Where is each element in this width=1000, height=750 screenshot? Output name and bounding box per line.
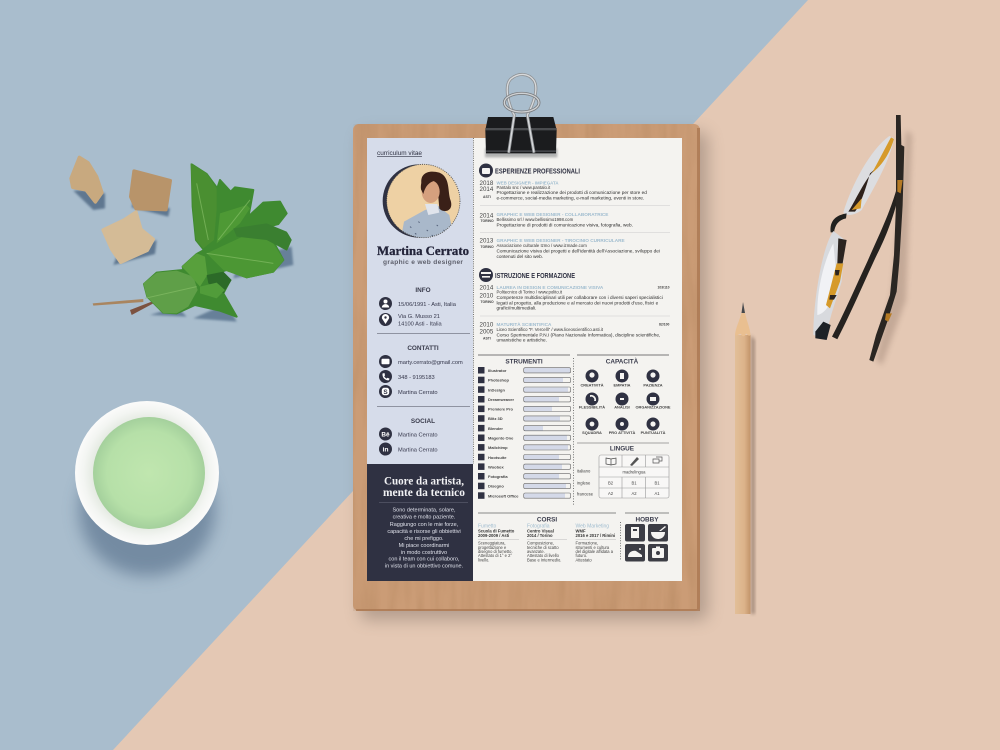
experience heading: ESPERIENZE PROFESSIONALI bbox=[495, 166, 580, 176]
sidebar panel bbox=[367, 138, 473, 464]
course: fotografia: avanzate. bbox=[527, 549, 545, 554]
soft skills: FLESSIBILITÀ bbox=[579, 404, 605, 410]
soft skills: CREATIVITÀ bbox=[580, 382, 604, 388]
language levels bbox=[608, 470, 660, 496]
course: fotografia: Composizione, bbox=[527, 540, 554, 546]
education heading: ISTRUZIONE E FORMAZIONE bbox=[495, 271, 575, 280]
sidebar column divider bbox=[472, 138, 474, 464]
course: fumetto bbox=[478, 524, 519, 562]
course: fumetto: 2009-2009 / Asti bbox=[478, 533, 509, 538]
contatti section: Martina Cerrato bbox=[398, 390, 438, 396]
tool rows: Magento One bbox=[488, 436, 514, 440]
soft skills: EMPATIA bbox=[614, 382, 631, 388]
diploma: Corso Sperimentale P.N.I (Piano Nazionale Informatica), discipline scientifiche, bbox=[496, 332, 660, 337]
course: web marketing: Web Marketing bbox=[576, 524, 609, 530]
tool rows: Photoshop bbox=[488, 378, 509, 383]
glasses shadow bbox=[876, 130, 912, 365]
motto body: capacità e risorse gli obbiettivi bbox=[387, 529, 461, 535]
job 1: 2014 bbox=[480, 186, 494, 193]
course: web marketing: strumenti e cultura bbox=[576, 545, 610, 550]
icon: speech bbox=[653, 457, 662, 463]
tool rows: Woobox bbox=[488, 464, 504, 469]
job 1: 2018 bbox=[480, 180, 494, 187]
social section: Martina Cerrato bbox=[398, 432, 438, 438]
soft skills: ORGANIZZAZIONE bbox=[635, 404, 671, 410]
job 1: Progettazione e realizzazione dei prodotti di comunicazione per store ed bbox=[496, 190, 647, 195]
degree: 2010 bbox=[480, 292, 494, 299]
degree: TORINO bbox=[480, 300, 494, 304]
degree: legati al progetto, alla produzione e al mercato dei nuovi prodotti d'uso, fisici e bbox=[496, 300, 659, 305]
job 3: Comunicazione visiva dei progetti e dell'identità dell'Associazione, sviluppo dei bbox=[496, 248, 660, 253]
course: web marketing: futuro. bbox=[576, 553, 587, 558]
course: fotografia: Centro Visual bbox=[527, 528, 554, 534]
clipboard board bbox=[353, 124, 700, 611]
upper lens bbox=[843, 136, 894, 215]
tool rows: Blender bbox=[488, 426, 503, 431]
education section bbox=[479, 268, 670, 343]
course: fumetto: progettazione e bbox=[478, 545, 507, 550]
degree: LAUREA IN DESIGN E COMUNICAZIONE VISIVA bbox=[496, 285, 604, 290]
courses section bbox=[478, 516, 616, 562]
tool rows bbox=[478, 367, 519, 499]
social section bbox=[379, 418, 438, 456]
tool rows: Premiere Pro bbox=[488, 407, 513, 412]
language names: inglese bbox=[577, 480, 591, 486]
green tea cup bbox=[75, 401, 219, 545]
course: fumetto: Fumetto bbox=[478, 524, 497, 530]
tools skills chart bbox=[478, 358, 571, 499]
soft skills: ANALISI bbox=[614, 404, 630, 410]
motto heading bbox=[383, 476, 465, 499]
job 2: Progettazione di prodotti di comunicazione visiva, fotografia, web. bbox=[496, 223, 633, 228]
courses section: CORSI bbox=[537, 516, 557, 524]
diploma: MATURITÀ SCIENTIFICA bbox=[496, 321, 552, 327]
course: web marketing: 2016 e 2017 / Rimini bbox=[576, 533, 615, 538]
tool rows: Fotografia bbox=[488, 474, 508, 479]
curriculum vitae label: curriculum vitae bbox=[377, 150, 423, 157]
hobby section: HOBBY bbox=[635, 516, 659, 524]
motto body: con il team con cui collaboro, bbox=[389, 556, 460, 562]
contatti section: 348 - 9195183 bbox=[398, 375, 435, 381]
diploma bbox=[480, 321, 669, 343]
language levels: B2 bbox=[608, 480, 614, 485]
social section: Martina Cerrato bbox=[398, 448, 438, 454]
job 1: Pantalo snc / www.pantalo.it bbox=[496, 185, 551, 190]
motto heading: Cuore da artista, bbox=[384, 476, 464, 488]
diploma: 2010 bbox=[480, 321, 494, 328]
course: fotografia bbox=[527, 524, 567, 562]
job 2: GRAPHIC E WEB DESIGNER - COLLABORATRICE bbox=[496, 212, 608, 217]
degree bbox=[480, 285, 670, 311]
clipboard shadow bbox=[360, 132, 708, 620]
language names: italiano bbox=[577, 468, 591, 474]
language levels: madrelingua bbox=[622, 470, 646, 474]
job 1: e-commerce, social-media marketing, e-mail marketing, eventi in store. bbox=[496, 196, 644, 200]
course: fumetto: Sceneggiatura, bbox=[478, 540, 506, 546]
course: web marketing bbox=[576, 524, 616, 562]
role: graphic e web designer bbox=[383, 259, 463, 266]
diploma: 2005 bbox=[480, 329, 494, 336]
motto panel bbox=[367, 464, 473, 581]
language levels: A1 bbox=[654, 491, 660, 496]
lower lens bbox=[813, 231, 847, 340]
course: fotografia: Base e Intermedio. bbox=[527, 558, 561, 562]
soft skills bbox=[579, 356, 671, 435]
soft skills: CAPACITÀ bbox=[606, 356, 639, 366]
soft skills: SQUADRA bbox=[582, 430, 602, 435]
name: Martina Cerrato bbox=[377, 243, 469, 258]
course: web marketing: del digitale affidata a bbox=[576, 549, 614, 554]
info section bbox=[379, 287, 457, 328]
tool rows: InDesign bbox=[488, 387, 505, 392]
info section: 15/06/1991 - Asti, Italia bbox=[398, 302, 457, 308]
job 2: TORINO bbox=[480, 219, 494, 223]
icon: reading bbox=[606, 458, 616, 465]
tool rows: Dreamweaver bbox=[488, 397, 514, 402]
course: web marketing: WMF bbox=[576, 528, 586, 534]
motto body: in modo costruttivo bbox=[401, 550, 447, 556]
diploma: Liceo Scientifico "F. Vercelli" / www.liceoscientifico.asti.it bbox=[496, 327, 604, 332]
course: fumetto: Scuola di Fumetto bbox=[478, 528, 515, 534]
soft skills: PUNTUALITÀ bbox=[641, 430, 666, 435]
hobby icons bbox=[625, 524, 668, 562]
pencil bbox=[735, 302, 750, 614]
language names bbox=[577, 468, 594, 496]
soft skills: PAZIENZA bbox=[643, 382, 663, 388]
degree: Politecnico di Torino / www.polito.it bbox=[496, 290, 563, 295]
tool bars bbox=[524, 368, 570, 498]
contatti section: S bbox=[383, 389, 388, 396]
languages table bbox=[577, 446, 669, 498]
soft skills: PRO ATTIVITÀ bbox=[609, 430, 635, 435]
language levels: A2 bbox=[608, 491, 614, 496]
diploma: ASTI bbox=[483, 336, 491, 340]
course: fotografia: Fotografia bbox=[527, 524, 550, 530]
motto body: in vista di un obbiettivo comune. bbox=[385, 564, 464, 570]
course: fumetto: Attestato di 1° e 2° bbox=[478, 553, 512, 558]
tool rows: Hootsuite bbox=[488, 455, 507, 460]
tool rows: Mailchimp bbox=[488, 445, 508, 450]
pencil shadow bbox=[751, 335, 755, 614]
job 3: Associazione culturale Izmo / www.izmade.com bbox=[496, 243, 587, 248]
tortoiseshell glasses bbox=[813, 115, 904, 362]
course: fotografia: Attestato di livello bbox=[527, 553, 560, 558]
degree: Competenze multidisciplinari utili per collaborare con i diversi saperi specialistici bbox=[496, 295, 663, 300]
degree: grafici/multimediali. bbox=[496, 306, 536, 311]
course: fotografia: 2014 / Torino bbox=[527, 533, 553, 538]
course: web marketing: Formazione, bbox=[576, 540, 598, 546]
contatti section: CONTATTI bbox=[407, 345, 439, 352]
job 3: GRAPHIC E WEB DESIGNER - TIROCINIO CURRICULARE bbox=[496, 238, 625, 243]
experience section bbox=[479, 164, 670, 259]
icon: pencil bbox=[630, 457, 639, 466]
info section: INFO bbox=[415, 287, 431, 294]
language levels: B1 bbox=[654, 480, 660, 485]
degree: 103/110 bbox=[658, 286, 670, 290]
tool rows: Microsoft Office bbox=[488, 493, 519, 498]
job 1: ASTI bbox=[483, 195, 491, 199]
motto body bbox=[385, 508, 464, 570]
motto body: Mi piace coordinarmi bbox=[399, 543, 449, 549]
job 3: TORINO bbox=[480, 245, 494, 249]
job 3 bbox=[480, 237, 660, 259]
job 2: 2014 bbox=[480, 212, 494, 219]
info section: Via G. Musso 21 bbox=[398, 314, 440, 320]
mint sprig bbox=[93, 163, 293, 322]
job 3: contenuti del sito web. bbox=[496, 254, 543, 259]
diploma: umanistiche e artistiche. bbox=[496, 338, 547, 343]
job 2 bbox=[480, 212, 633, 228]
contatti section: marty.cerrato@gmail.com bbox=[398, 360, 463, 366]
sugar cubes bbox=[71, 157, 170, 265]
profile photo bbox=[383, 164, 460, 243]
motto body: Sono determinata, solare, bbox=[393, 508, 456, 514]
job 1: WEB DESIGNER - IMPIEGATA bbox=[496, 180, 559, 186]
job 3: 2013 bbox=[480, 237, 494, 244]
motto heading: mente da tecnico bbox=[383, 487, 465, 499]
motto body: che mi prefiggo. bbox=[404, 536, 444, 542]
icon: graduation cap bbox=[479, 268, 493, 282]
language levels: B1 bbox=[631, 480, 637, 485]
tool rows: Illustrator bbox=[488, 368, 507, 373]
social section: in bbox=[382, 446, 389, 454]
language names: francese bbox=[577, 492, 594, 496]
motto body: Raggiungo con le mie forze, bbox=[390, 522, 459, 528]
tool rows: Disegno bbox=[488, 484, 504, 489]
tool rows: Blitz 3D bbox=[488, 416, 503, 421]
temple arms bbox=[832, 115, 904, 362]
paper sheet bbox=[367, 138, 682, 581]
tools skills chart: STRUMENTI bbox=[505, 358, 543, 366]
degree: 2014 bbox=[480, 285, 494, 292]
course: web marketing: Attestato bbox=[576, 558, 592, 562]
job 2: Bellissimo srl / www.bellissimo1998.com bbox=[496, 217, 574, 222]
job 1 bbox=[480, 180, 647, 200]
languages table: LINGUE bbox=[610, 446, 635, 452]
motto body: creativa e molto paziente. bbox=[393, 515, 456, 521]
course: fumetto: livello. bbox=[478, 558, 489, 562]
cup shadow bbox=[79, 444, 215, 576]
icon: briefcase bbox=[479, 164, 493, 178]
contatti section bbox=[379, 345, 463, 398]
info section: 14100 Asti - Italia bbox=[398, 322, 442, 328]
social section: SOCIAL bbox=[411, 418, 435, 425]
social section: Bē bbox=[381, 431, 390, 438]
bridge bbox=[831, 213, 847, 232]
diploma: 82/100 bbox=[659, 322, 669, 326]
course: fumetto: disegno di fumetto. bbox=[478, 549, 513, 554]
course: fotografia: tecniche di scatto bbox=[527, 545, 559, 550]
hobby section bbox=[625, 516, 668, 562]
binder clip bbox=[485, 74, 557, 157]
language levels: A2 bbox=[631, 491, 637, 496]
